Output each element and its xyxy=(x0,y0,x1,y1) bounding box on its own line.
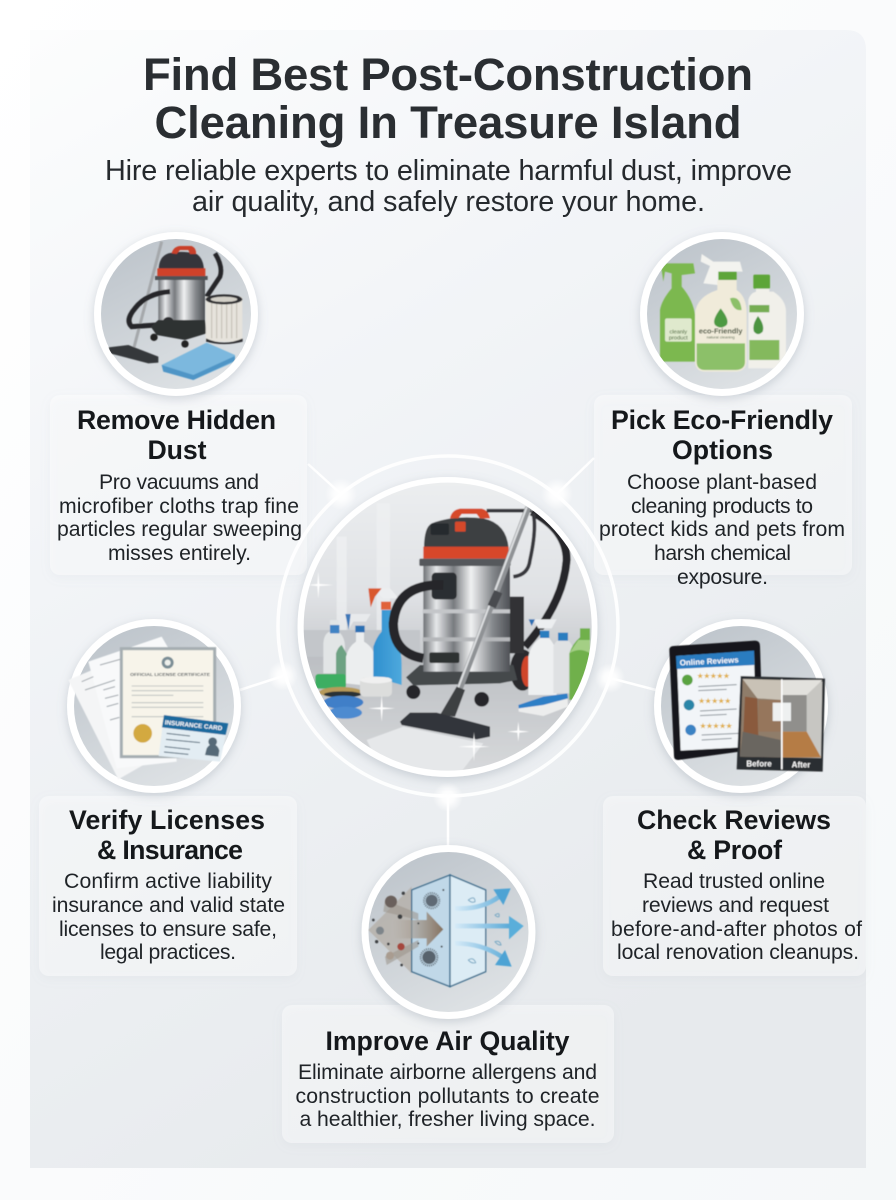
icon: certificate, papers and ID card: OFFICIAL LICENSE CERTIFICATE xyxy=(130,672,211,678)
description: licenses to ensure safe, xyxy=(59,918,277,941)
icon circle: licenses and insurance xyxy=(67,619,241,793)
icon: green spray bottles: eco-Friendly xyxy=(699,326,743,335)
icon: review tablet and before-after photo xyxy=(669,641,825,772)
icon circle: reviews and proof xyxy=(654,619,828,793)
heading: Pick Eco-Friendly xyxy=(611,405,833,435)
card: improve air quality xyxy=(282,1005,614,1143)
description: insurance and valid state xyxy=(52,894,285,917)
icon: review tablet and before-after photo: Before xyxy=(746,760,772,769)
heading: Check Reviews xyxy=(637,805,831,835)
heading: Options xyxy=(672,435,773,465)
description: Read trusted online xyxy=(643,870,825,893)
icon: vacuum, filter and cloth xyxy=(109,242,243,380)
icon: green spray bottles: cleanly xyxy=(670,329,687,335)
sponges left xyxy=(315,674,346,689)
icon circle: air quality xyxy=(362,845,536,1019)
card: check reviews and proof xyxy=(603,796,866,976)
description: construction pollutants to create xyxy=(296,1085,600,1108)
description: Choose plant-based xyxy=(627,471,817,494)
title: Find Best Post-Construction xyxy=(143,49,753,100)
floor head xyxy=(400,713,490,739)
lid xyxy=(424,517,509,548)
heading xyxy=(637,805,831,865)
handle loop xyxy=(487,511,534,577)
heading: & Insurance xyxy=(97,835,243,865)
subtitle: air quality, and safely restore your home. xyxy=(192,186,705,218)
description: Pro vacuums and xyxy=(99,471,259,494)
description: harsh chemical xyxy=(654,542,791,565)
heading: Verify Licenses xyxy=(69,805,265,835)
description: local renovation cleanups. xyxy=(617,941,859,964)
body xyxy=(423,565,510,672)
central hub xyxy=(278,456,618,796)
icon: filter with polluted air and clean air arrows xyxy=(368,875,524,987)
title xyxy=(143,49,753,148)
base xyxy=(406,665,517,685)
illustration: vacuum cleaner and supplies xyxy=(300,480,600,777)
description: Confirm active liability xyxy=(64,870,272,893)
card: verify licenses and insurance xyxy=(39,796,297,976)
description: legal practices. xyxy=(100,941,236,964)
description: microfiber cloths trap fine xyxy=(59,495,299,518)
wand xyxy=(457,507,528,697)
description: protect kids and pets from xyxy=(599,518,845,541)
icon: review tablet and before-after photo: Online Reviews xyxy=(679,655,739,668)
icon: certificate, papers and ID card: INSURANCE CARD xyxy=(164,719,223,732)
description: Eliminate airborne allergens and xyxy=(298,1061,597,1084)
hose xyxy=(432,573,457,599)
icon: review tablet and before-after photo: ★★★★★ xyxy=(699,721,733,730)
heading: & Proof xyxy=(687,835,782,865)
title: Cleaning In Treasure Island xyxy=(154,97,742,148)
icon circle: eco-friendly bottles xyxy=(640,232,804,396)
icon: certificate, papers and ID card xyxy=(68,637,228,779)
icon: green spray bottles: product xyxy=(669,335,688,341)
card: remove hidden dust xyxy=(50,395,307,575)
description: misses entirely. xyxy=(108,542,251,565)
heading: Remove Hidden xyxy=(77,405,276,435)
subtitle xyxy=(105,155,792,218)
bottles right xyxy=(528,630,557,695)
back hose xyxy=(525,512,567,647)
icon circle: vacuum and microfiber xyxy=(94,232,258,396)
connector lines and glowing nodes xyxy=(240,458,656,846)
wheels xyxy=(406,685,420,699)
sparkles xyxy=(308,572,529,762)
description xyxy=(296,1061,600,1131)
description: cleaning products to xyxy=(631,495,813,518)
description xyxy=(57,471,302,565)
bottles left xyxy=(323,620,345,673)
icon: review tablet and before-after photo: ★★★★★ xyxy=(697,672,730,681)
description: before-and-after photos of xyxy=(611,918,862,941)
heading xyxy=(77,405,276,465)
description xyxy=(611,870,862,964)
description xyxy=(52,870,285,964)
description: exposure. xyxy=(677,566,768,589)
subtitle: Hire reliable experts to eliminate harmful dust, improve xyxy=(105,155,792,187)
heading xyxy=(611,405,833,465)
heading xyxy=(69,805,265,865)
description: reviews and request xyxy=(642,894,829,917)
heading: Improve Air Quality xyxy=(326,1026,570,1056)
card: pick eco-friendly options xyxy=(594,395,852,589)
description: particles regular sweeping xyxy=(57,518,302,541)
icon: green spray bottles: natural cleaning xyxy=(707,335,735,340)
description: a healthier, fresher living space. xyxy=(300,1108,596,1131)
icon: review tablet and before-after photo: ★★★★★ xyxy=(698,696,731,705)
icon: green spray bottles xyxy=(660,254,786,372)
icon: review tablet and before-after photo: After xyxy=(792,760,810,769)
description xyxy=(599,471,845,589)
heading: Dust xyxy=(148,435,207,465)
